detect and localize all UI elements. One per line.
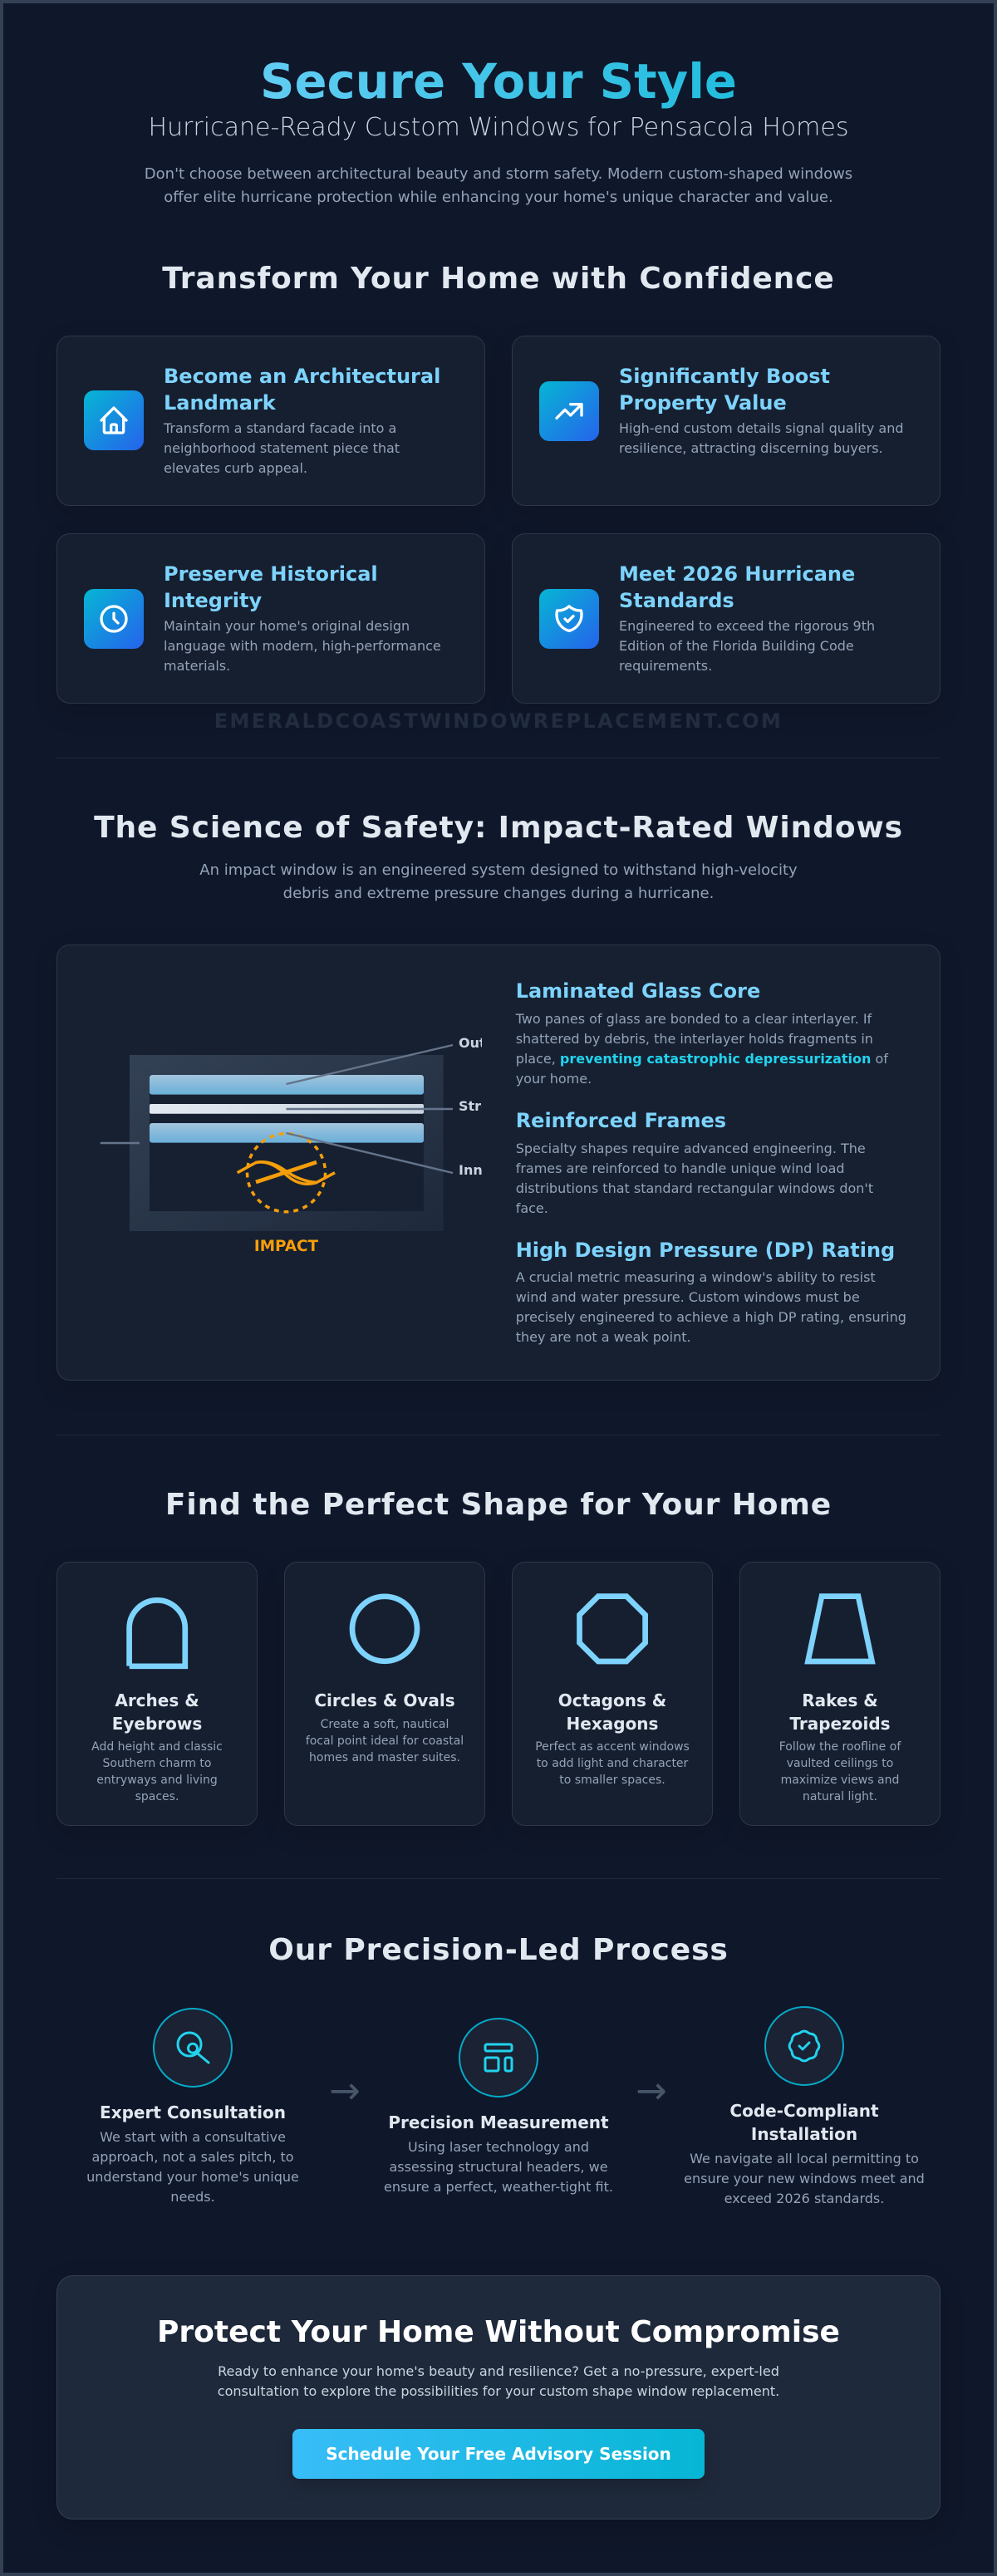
cta button bbox=[292, 2429, 705, 2479]
header bbox=[145, 54, 852, 206]
detail heading: laminated glass: Laminated Glass Core bbox=[516, 979, 760, 1003]
card: property value bbox=[512, 336, 941, 506]
card text: Edition of the Florida Building Code bbox=[619, 638, 854, 654]
icon: octagon bbox=[577, 1593, 648, 1665]
detail heading: frames: Reinforced Frames bbox=[516, 1109, 726, 1132]
card text: elevates curb appeal. bbox=[164, 460, 307, 476]
shape text: Perfect as accent windows bbox=[535, 1740, 690, 1754]
shape text: entryways and living bbox=[96, 1774, 218, 1787]
shape text: focal point ideal for coastal bbox=[306, 1735, 464, 1748]
card heading bbox=[164, 365, 440, 415]
card heading: Landmark bbox=[164, 391, 276, 415]
shape text: to smaller spaces. bbox=[559, 1774, 665, 1787]
step text: Using laser technology and bbox=[408, 2138, 589, 2155]
detail text: frames: Specialty shapes require advanced engineering. The bbox=[516, 1141, 866, 1156]
step: measurement bbox=[384, 2018, 613, 2195]
cta button: Schedule Your Free Advisory Session bbox=[326, 2444, 671, 2464]
step title bbox=[729, 2101, 879, 2144]
card heading: Property Value bbox=[619, 391, 787, 415]
shape name: Trapezoids bbox=[789, 1714, 891, 1734]
impact mark bbox=[238, 1134, 335, 1212]
shape text: Create a soft, nautical bbox=[321, 1718, 449, 1731]
shape text: vaulted ceilings to bbox=[787, 1757, 893, 1770]
detail heading: dp rating: High Design Pressure (DP) Rating bbox=[516, 1239, 895, 1262]
card heading: Significantly Boost bbox=[619, 365, 830, 388]
card heading: Become an Architectural bbox=[164, 365, 440, 388]
intro text: offer elite hurricane protection while enhancing your home's unique character and value. bbox=[164, 189, 833, 206]
icon: house bbox=[84, 390, 144, 450]
card heading: Standards bbox=[619, 589, 734, 612]
icon: search bbox=[153, 2008, 233, 2088]
card text: neighborhood statement piece that bbox=[164, 440, 400, 456]
card heading: Preserve Historical bbox=[164, 562, 378, 586]
card: trapezoids bbox=[739, 1562, 941, 1826]
shape text: to add light and character bbox=[537, 1757, 688, 1770]
interlayer bbox=[150, 1104, 424, 1114]
inner glass pane bbox=[150, 1123, 424, 1143]
heading: transform: Transform Your Home with Confidence bbox=[162, 262, 835, 296]
section: science of safety bbox=[56, 811, 941, 1381]
step title: Code-Compliant bbox=[729, 2101, 879, 2121]
intro text: Don't choose between architectural beauty and storm safety. Modern custom-shaped windows bbox=[145, 165, 852, 183]
step text: We navigate all local permitting to bbox=[690, 2150, 919, 2166]
card text: Transform a standard facade into a bbox=[164, 420, 396, 436]
shape name: Rakes & bbox=[802, 1690, 878, 1710]
detail text: laminated glass: place, preventing catastrophic depressurization of bbox=[516, 1051, 888, 1067]
cta text: Ready to enhance your home's beauty and resilience? Get a no-pressure, expert-led bbox=[218, 2363, 779, 2379]
card text: High-end custom details signal quality and bbox=[619, 420, 904, 436]
step text: ensure your new windows meet and bbox=[684, 2170, 925, 2186]
subtitle: Hurricane-Ready Custom Windows for Pensacola Homes bbox=[149, 113, 848, 142]
card heading bbox=[164, 562, 378, 612]
icon: arch bbox=[126, 1597, 188, 1670]
shape name: Arches & bbox=[115, 1690, 199, 1710]
shape name: Eyebrows bbox=[112, 1714, 202, 1734]
title bbox=[56, 55, 941, 110]
shape text: Southern charm to bbox=[103, 1757, 211, 1770]
cta text: consultation to explore the possibilities for your custom shape window replacement. bbox=[218, 2382, 779, 2399]
card text bbox=[619, 420, 904, 456]
icon: trending up bbox=[539, 381, 599, 441]
intro text bbox=[145, 165, 852, 206]
detail text: frames: distributions that standard rectangular windows don't bbox=[516, 1180, 873, 1196]
card: arches bbox=[56, 1562, 258, 1826]
card text bbox=[163, 420, 400, 476]
section intro bbox=[199, 861, 798, 902]
panel: window diagram and details bbox=[56, 945, 941, 1381]
step text: needs. bbox=[170, 2188, 215, 2205]
card: historical bbox=[56, 533, 485, 704]
watermark: EMERALDCOASTWINDOWREPLACEMENT.COM bbox=[214, 709, 783, 733]
section intro: debris and extreme pressure changes during a hurricane. bbox=[283, 885, 714, 902]
card: octagons bbox=[512, 1562, 713, 1826]
card heading: Meet 2026 Hurricane bbox=[619, 562, 855, 586]
step text: understand your home's unique bbox=[86, 2168, 299, 2185]
detail text: dp rating: precisely engineered to achieve a high DP rating, ensuring bbox=[516, 1309, 906, 1325]
icon: circle bbox=[349, 1593, 420, 1665]
card: landmark bbox=[56, 336, 485, 506]
shape text: Add height and classic bbox=[91, 1740, 223, 1754]
shape text: natural light. bbox=[803, 1790, 877, 1803]
shape text: homes and master suites. bbox=[309, 1751, 460, 1764]
card text: language with modern, high-performance bbox=[164, 638, 441, 654]
section: benefits bbox=[56, 262, 941, 704]
detail text: frames: frames are reinforced to handle unique wind load bbox=[516, 1160, 845, 1176]
card text bbox=[164, 618, 441, 674]
shape name bbox=[112, 1690, 202, 1734]
step title: Installation bbox=[751, 2124, 857, 2144]
window frame bbox=[130, 1055, 444, 1231]
shape text: maximize views and bbox=[781, 1774, 899, 1787]
detail text: laminated glass bbox=[515, 1011, 889, 1087]
shape text bbox=[306, 1718, 464, 1764]
step text: approach, not a sales pitch, to bbox=[91, 2148, 294, 2165]
detail text: dp rating: A crucial metric measuring a window's ability to resist bbox=[516, 1269, 876, 1285]
outer glass pane bbox=[150, 1075, 424, 1095]
call to action panel bbox=[56, 2275, 941, 2520]
card: circles bbox=[284, 1562, 485, 1826]
card text: materials. bbox=[164, 658, 230, 674]
card heading: Integrity bbox=[164, 589, 262, 612]
section: process bbox=[86, 1933, 925, 2206]
section intro: An impact window is an engineered system designed to withstand high-velocity bbox=[199, 861, 798, 879]
icon: clock bbox=[84, 589, 144, 649]
card heading bbox=[619, 562, 855, 612]
detail text: dp rating: wind and water pressure. Custom windows must be bbox=[516, 1289, 860, 1305]
card: hurricane standards bbox=[512, 533, 941, 704]
detail text: laminated glass: your home. bbox=[516, 1071, 592, 1087]
card text: Engineered to exceed the rigorous 9th bbox=[619, 618, 875, 634]
step text: We start with a consultative bbox=[100, 2128, 286, 2145]
heading: science: The Science of Safety: Impact-Rated Windows bbox=[94, 811, 903, 845]
shape text bbox=[91, 1740, 223, 1803]
icon: layout bbox=[459, 2018, 538, 2098]
card heading bbox=[619, 365, 830, 415]
detail text: laminated glass: Two panes of glass are bonded to a clear interlayer. If bbox=[516, 1011, 872, 1027]
detail text: frames: face. bbox=[516, 1200, 548, 1216]
icon: trapezoid bbox=[804, 1593, 876, 1665]
arrow: → bbox=[636, 2068, 667, 2112]
detail text: dp rating bbox=[516, 1269, 906, 1345]
shape name: Circles & Ovals bbox=[314, 1690, 455, 1710]
shape text bbox=[779, 1740, 901, 1803]
heading: shapes: Find the Perfect Shape for Your Home bbox=[165, 1488, 832, 1522]
shape text: Follow the roofline of bbox=[779, 1740, 901, 1754]
shape name bbox=[558, 1690, 666, 1734]
step title: Precision Measurement bbox=[388, 2112, 609, 2132]
step text: ensure a perfect, weather-tight fit. bbox=[384, 2178, 613, 2195]
step text bbox=[86, 2128, 299, 2205]
heading: process: Our Precision-Led Process bbox=[268, 1933, 729, 1967]
cta heading: Protect Your Home Without Compromise bbox=[157, 2315, 840, 2349]
leader lines bbox=[101, 1045, 453, 1173]
detail text: dp rating: they are not a weak point. bbox=[516, 1329, 691, 1345]
step text bbox=[684, 2150, 925, 2206]
impact label: IMPACT bbox=[254, 1238, 319, 1255]
step: installation bbox=[684, 2006, 925, 2206]
step: consultation bbox=[86, 2008, 299, 2205]
icon: badge check bbox=[764, 2006, 844, 2086]
cta text bbox=[218, 2363, 779, 2399]
card text: requirements. bbox=[619, 658, 712, 674]
step text: assessing structural headers, we bbox=[389, 2158, 608, 2175]
diagram: impact window cross section bbox=[100, 1035, 482, 1255]
card text bbox=[619, 618, 875, 674]
shape text: spaces. bbox=[135, 1790, 179, 1803]
card text: resilience, attracting discerning buyers. bbox=[619, 440, 883, 456]
shape text bbox=[535, 1740, 690, 1787]
step text: exceed 2026 standards. bbox=[724, 2190, 884, 2206]
shape name: Octagons & bbox=[558, 1690, 666, 1710]
icon: shield bbox=[539, 589, 599, 649]
detail text: frames bbox=[516, 1141, 873, 1216]
card text: Maintain your home's original design bbox=[164, 618, 410, 634]
title: Secure Your Style bbox=[260, 54, 737, 110]
shape name bbox=[789, 1690, 891, 1734]
diagram labels bbox=[459, 1035, 587, 1178]
section: shapes bbox=[56, 1488, 941, 1826]
step title: Expert Consultation bbox=[100, 2103, 286, 2122]
shape name: Hexagons bbox=[567, 1714, 658, 1734]
arrow: → bbox=[329, 2068, 361, 2112]
detail text: laminated glass: shattered by debris, the interlayer holds fragments in bbox=[516, 1031, 873, 1047]
step text bbox=[384, 2138, 613, 2195]
